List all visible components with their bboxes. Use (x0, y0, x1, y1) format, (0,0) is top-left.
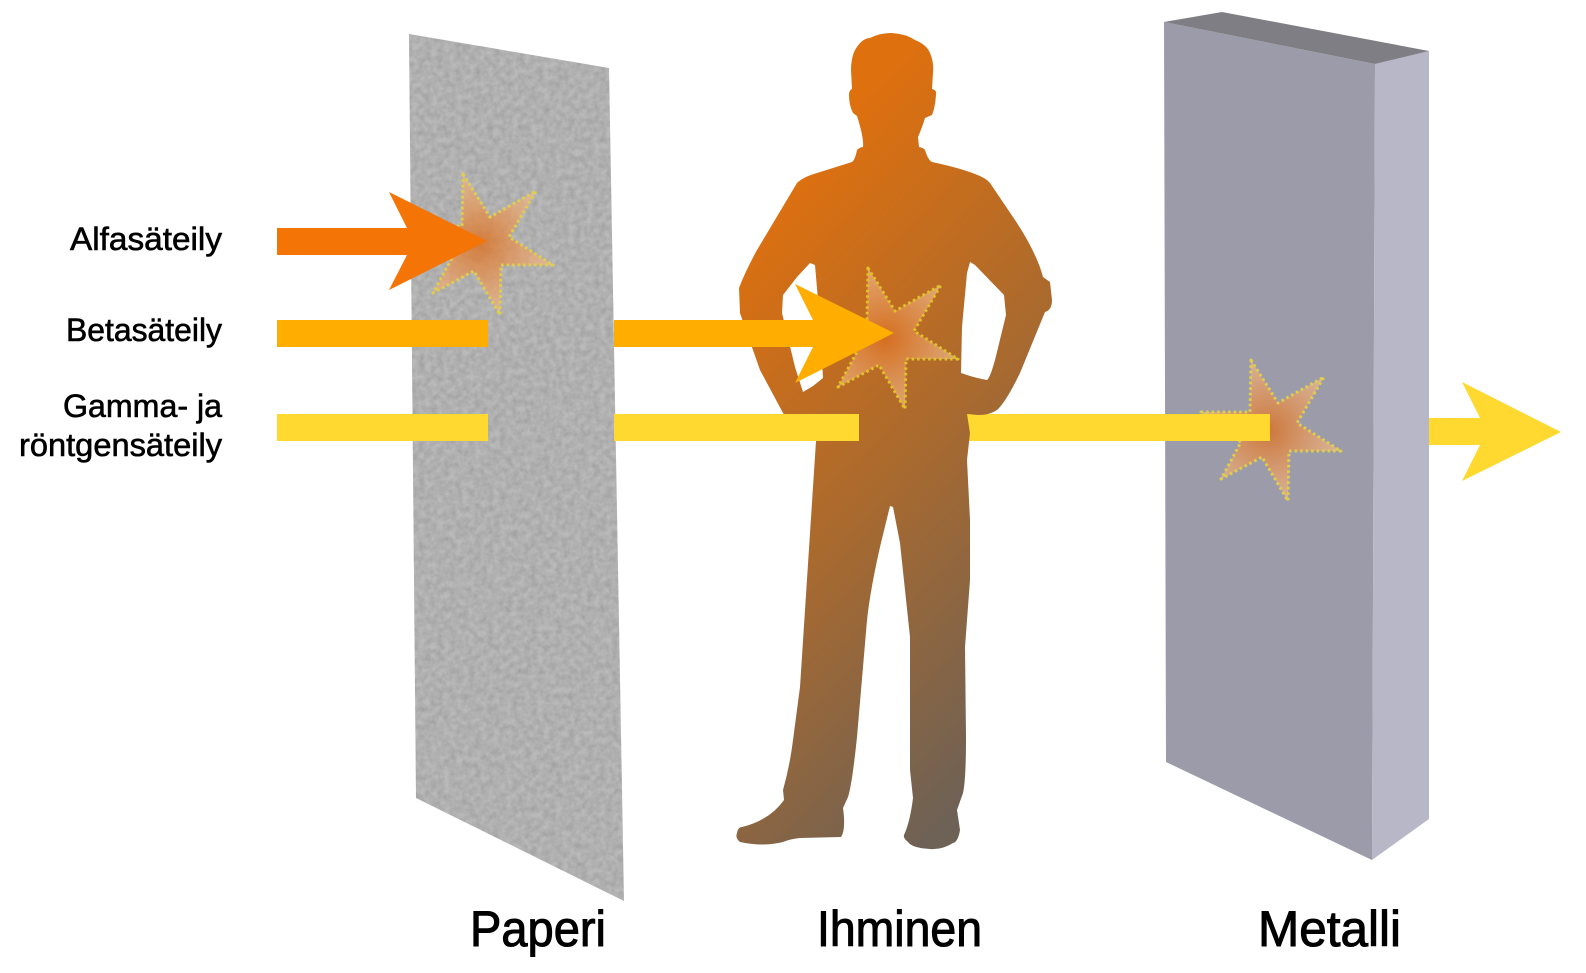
icon: impact star on person (818, 268, 958, 409)
label: human: Ihminen (817, 901, 982, 957)
arrow: gamma radiation exiting metal (1429, 382, 1561, 481)
arrow: gamma radiation between person and metal (950, 414, 1270, 441)
arrow: gamma radiation between paper and person (614, 414, 859, 441)
label: alpha radiation: Alfasäteily (70, 221, 222, 257)
label: gamma and x-ray radiation: röntgensäteily (19, 427, 222, 463)
arrow: alpha radiation stopped by paper (277, 192, 487, 290)
label: gamma and x-ray radiation: Gamma- ja (63, 388, 222, 424)
label: metal: Metalli (1258, 901, 1401, 957)
arrow: beta radiation stopped by person (614, 284, 894, 383)
icon: person silhouette (736, 33, 1052, 849)
label: beta radiation: Betasäteily (66, 312, 222, 348)
panel: metal block (1164, 12, 1429, 860)
arrow: gamma radiation before paper (277, 414, 488, 441)
icon: impact star on metal (1201, 360, 1341, 501)
panel: paper sheet (409, 34, 624, 901)
label: paper: Paperi (470, 901, 606, 957)
label: gamma and x-ray radiation (19, 388, 222, 463)
arrow: beta radiation before paper (277, 320, 488, 347)
icon: impact star on paper (413, 174, 553, 315)
